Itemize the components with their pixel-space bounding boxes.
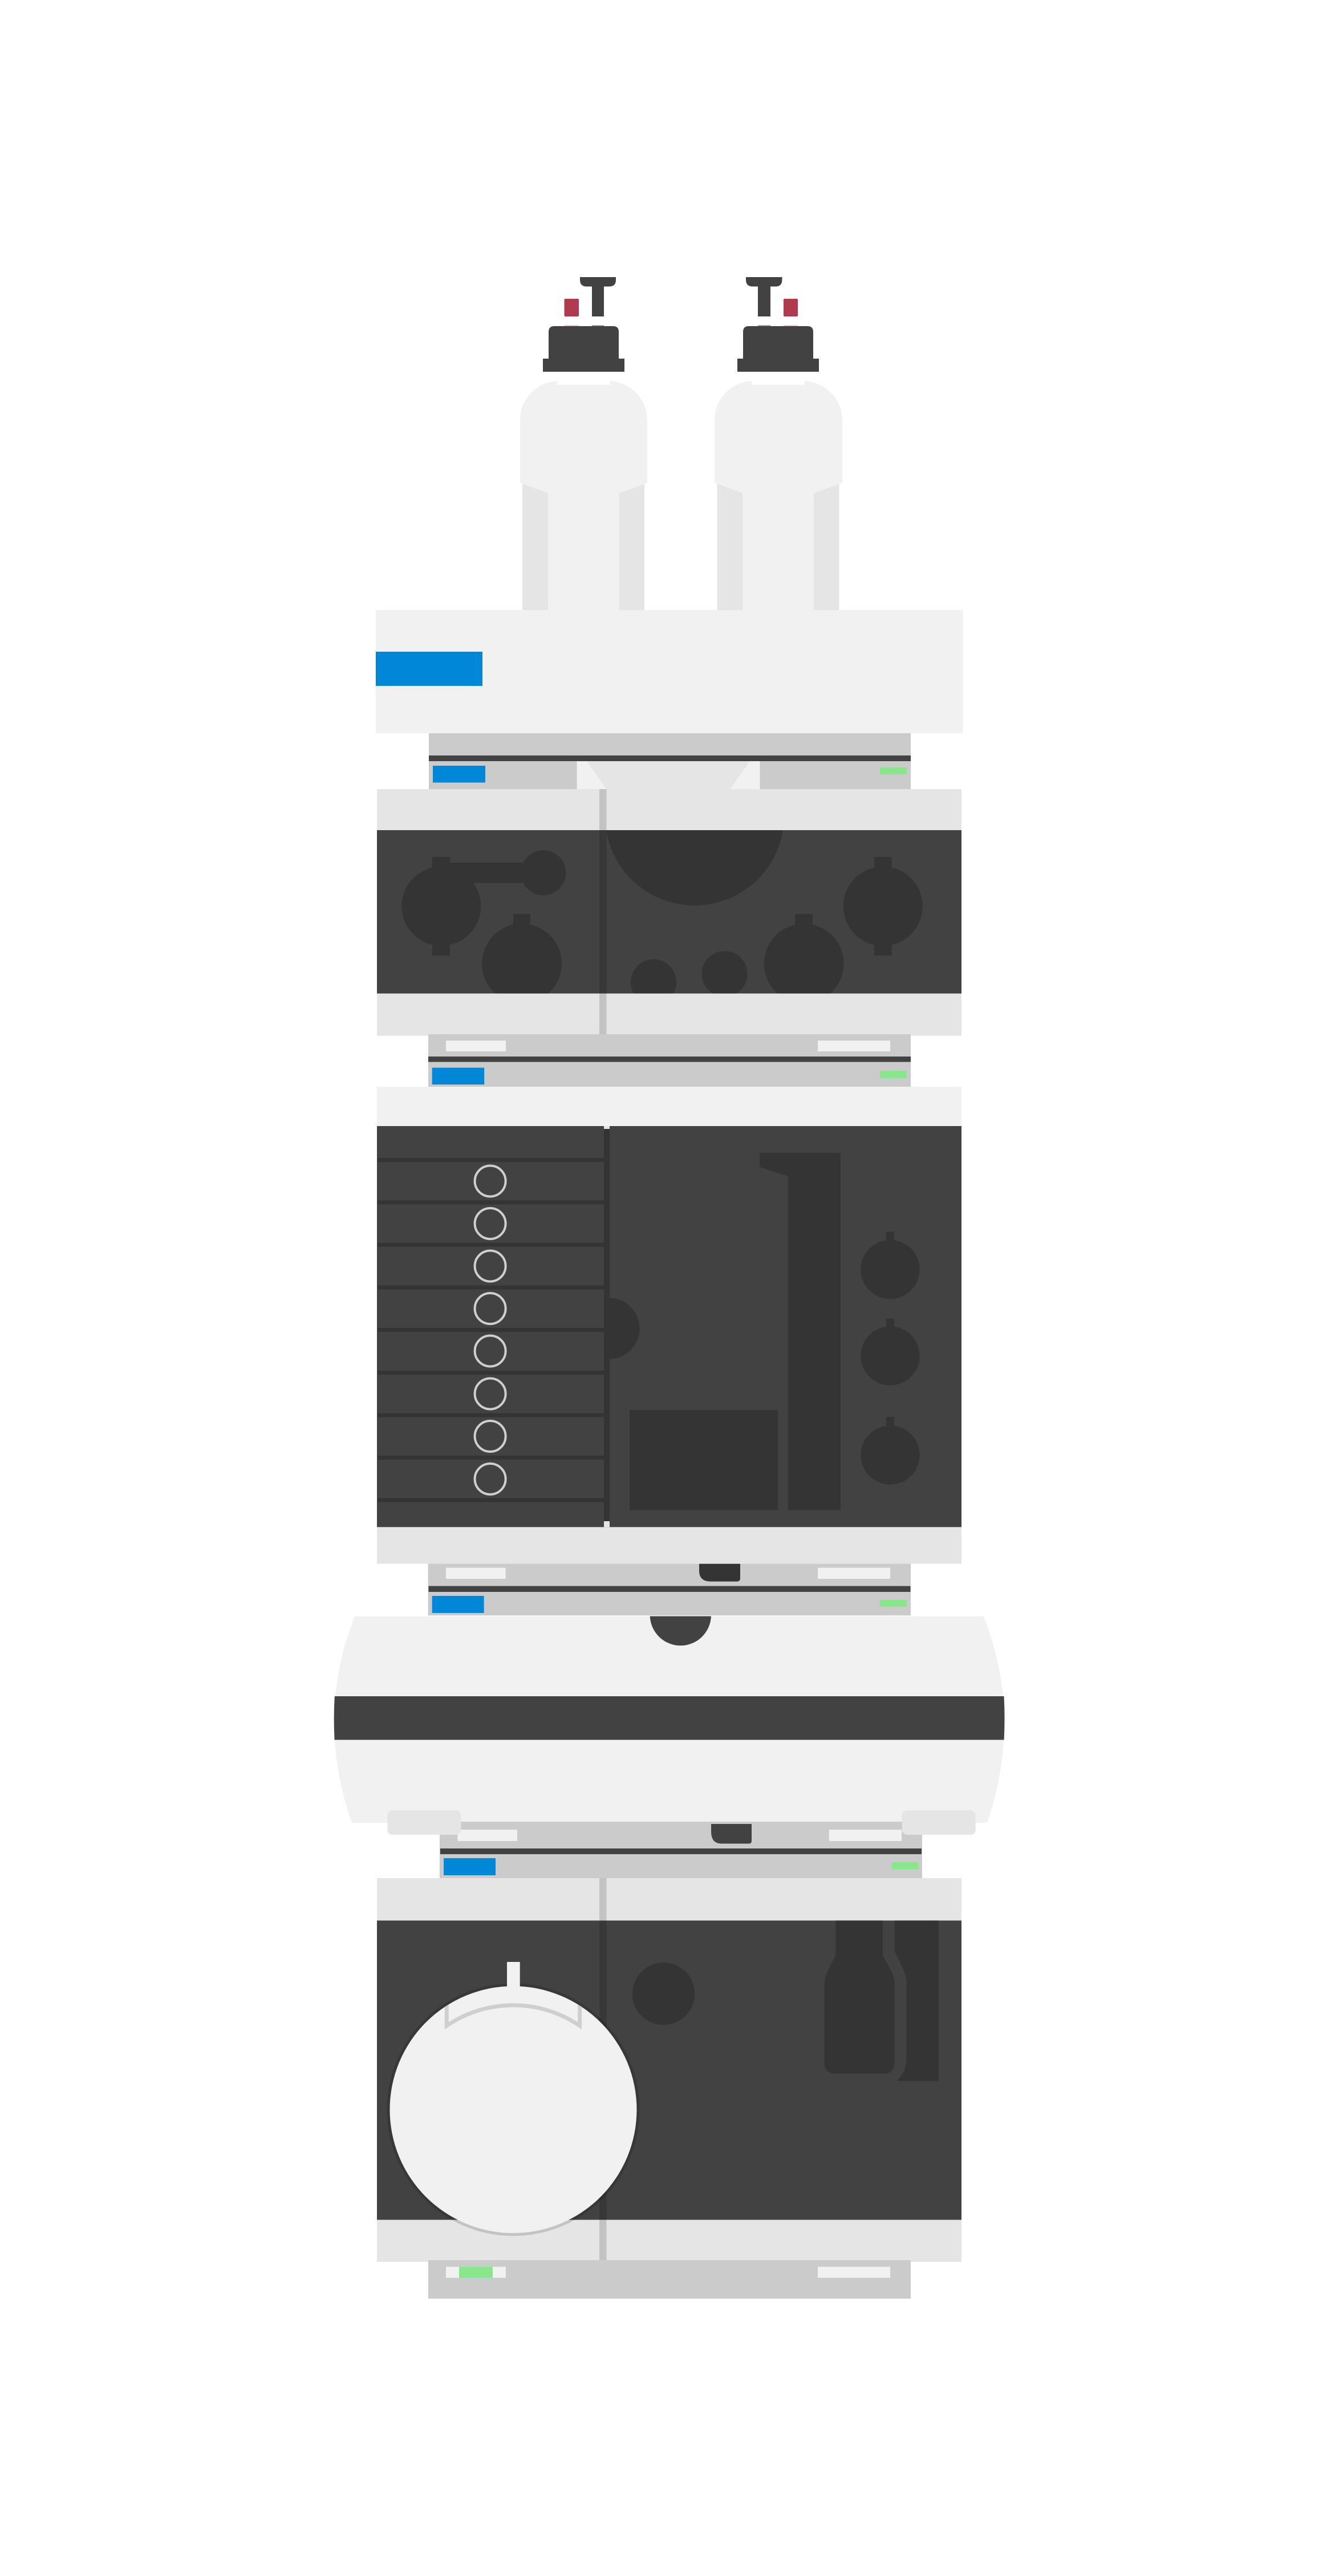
solvent bottle right [715, 277, 842, 610]
dial [390, 1986, 636, 2233]
oven foot right [902, 1810, 976, 1835]
autosampler module [377, 1087, 961, 1564]
right fittings [861, 1232, 920, 1485]
detector bottle silhouette [825, 1920, 895, 2074]
dial arch [447, 2001, 580, 2026]
pump dark fittings [401, 830, 923, 993]
detector side panel [895, 1920, 939, 2081]
dial ring [388, 1985, 638, 2234]
detector round port [632, 1963, 695, 2025]
pump module [377, 789, 961, 1035]
solvent tray top unit [376, 610, 963, 733]
divider half circle [610, 1298, 640, 1359]
solvent bottle left [520, 277, 647, 610]
connector strip 1 [429, 733, 911, 789]
column oven unit [334, 1616, 1005, 1823]
illustration: HPLC instrument stack [334, 277, 1005, 2299]
connector strip 3 [428, 1564, 911, 1615]
detector module [377, 1878, 961, 2262]
needle column [760, 1153, 841, 1510]
oven dark band [334, 1696, 1005, 1740]
oven top notch [650, 1616, 711, 1645]
base strip [428, 2260, 911, 2299]
sample vial rings [475, 1165, 506, 1494]
oven foot left [387, 1810, 461, 1835]
dial knob [507, 1962, 520, 1987]
sample tray rows [378, 1158, 604, 1502]
connector strip 2 [428, 1034, 911, 1087]
autosampler divider [604, 1126, 610, 1527]
lower compartment [630, 1410, 778, 1510]
connector strip 4 [440, 1822, 922, 1878]
tray blue label [376, 652, 482, 686]
